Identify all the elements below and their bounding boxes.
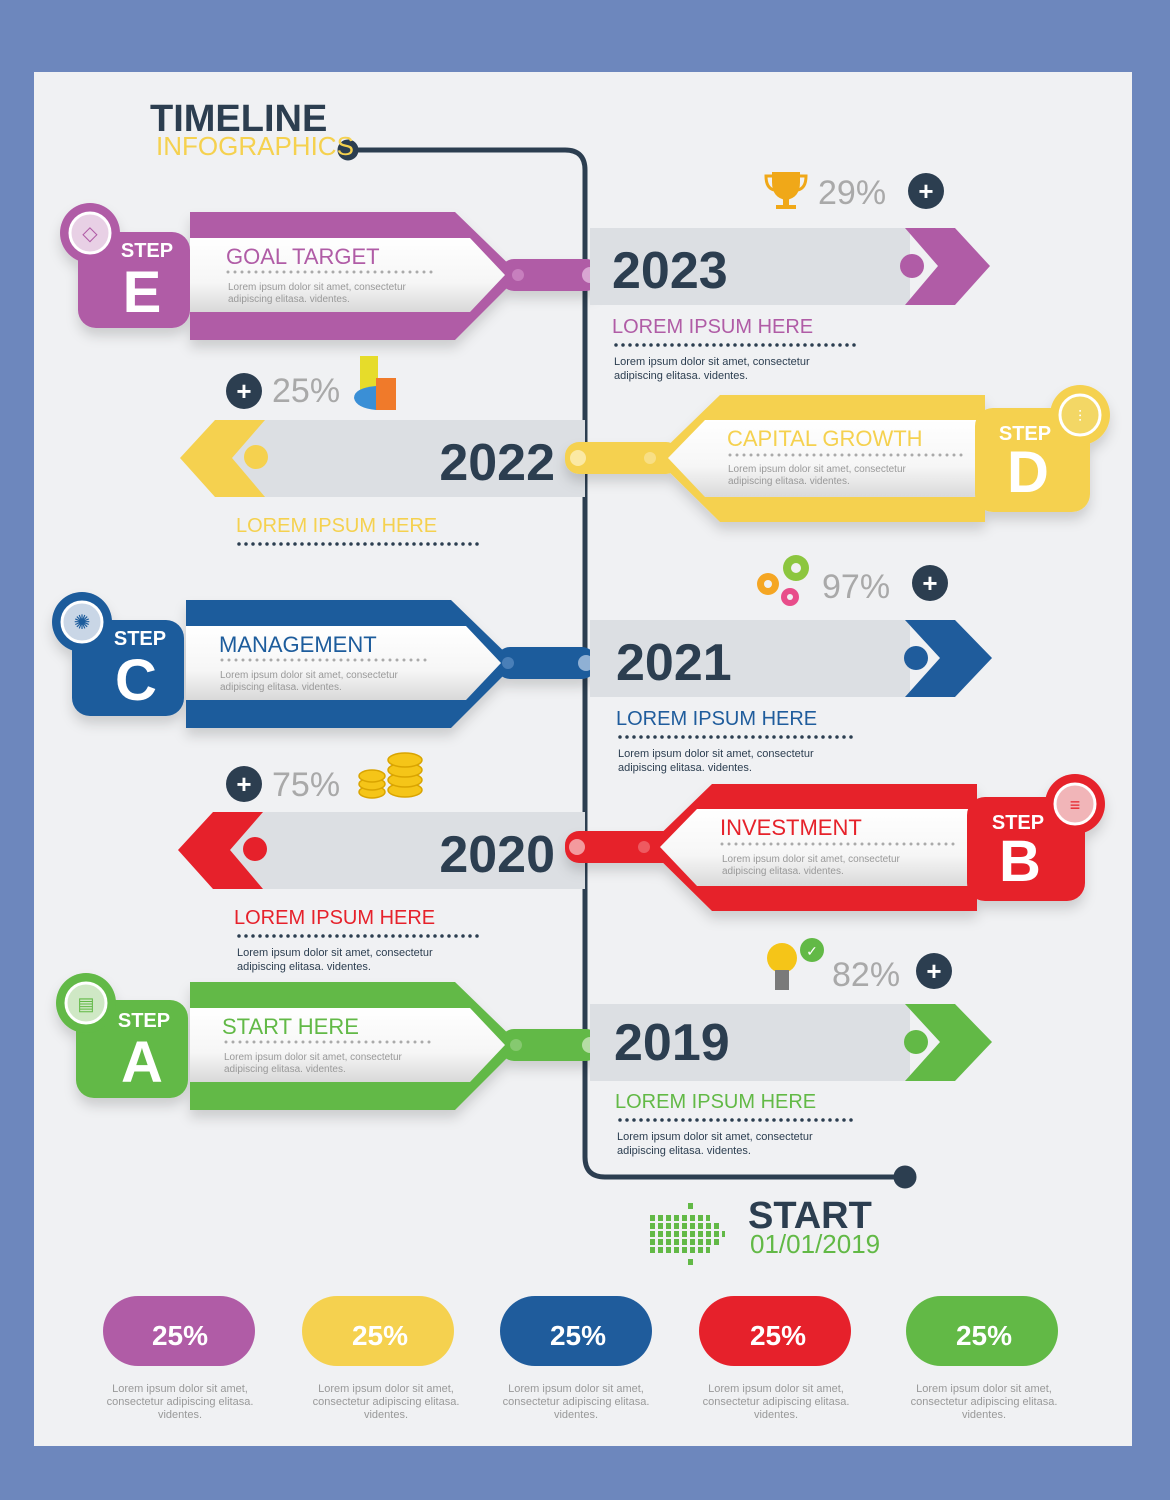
pill: green: Lorem ipsum dolor sit amet,: [916, 1383, 1052, 1395]
pill: yellow: [302, 1296, 459, 1421]
2023 year bar: LOREM IPSUM HERE: [612, 316, 813, 338]
2020 year bar: LOREM IPSUM HERE: [234, 907, 435, 929]
timeline line: [340, 142, 914, 1186]
2019 year bar: Lorem ipsum dolor sit amet, consectetur: [617, 1131, 813, 1143]
2021 year bar: Lorem ipsum dolor sit amet, consectetur: [618, 748, 814, 760]
stat 75%: [226, 753, 422, 804]
pill: purple: [103, 1296, 255, 1421]
step E banner: [60, 203, 600, 340]
step C banner: MANAGEMENT: [219, 632, 377, 657]
step B banner: INVESTMENT: [720, 815, 862, 840]
2019 year bar: [590, 1004, 992, 1157]
2021 year bar: 2021: [616, 634, 732, 692]
2021 year bar: adipiscing elitasa. videntes.: [618, 762, 752, 774]
stat 29%: [766, 172, 944, 212]
pill: purple: Lorem ipsum dolor sit amet,: [112, 1383, 248, 1395]
icon: light bulb: ✓: [806, 943, 818, 959]
stat 82%: 82%: [832, 956, 900, 994]
step A banner: STEP: [118, 1010, 170, 1032]
2020 year bar: 2020: [439, 826, 555, 884]
stat 25%: [226, 356, 396, 410]
step C banner: C: [115, 648, 157, 713]
pill: red: [699, 1296, 851, 1421]
step A banner: A: [121, 1030, 163, 1095]
2022 year bar: LOREM IPSUM HERE: [236, 515, 437, 537]
step D banner: [565, 385, 1110, 522]
step C banner: [52, 592, 596, 728]
2020 year bar: Lorem ipsum dolor sit amet, consectetur: [237, 947, 433, 959]
pill: yellow: Lorem ipsum dolor sit amet,: [318, 1383, 454, 1395]
icon: light bulb: [767, 938, 824, 990]
pill: blue: videntes.: [554, 1409, 598, 1421]
stat 97%: [757, 555, 948, 606]
step E banner: ◇: [82, 223, 98, 245]
pill: green: videntes.: [962, 1409, 1006, 1421]
2019 year bar: LOREM IPSUM HERE: [615, 1091, 816, 1113]
step A banner: adipiscing elitasa. videntes.: [224, 1064, 346, 1075]
2023 year bar: 2023: [612, 242, 728, 300]
step C banner: adipiscing elitasa. videntes.: [220, 682, 342, 693]
pill: purple: videntes.: [158, 1409, 202, 1421]
title: [150, 98, 354, 161]
step B banner: Lorem ipsum dolor sit amet, consectetur: [722, 854, 901, 865]
icon: dotted arrow: [650, 1206, 725, 1262]
stat 29%: +: [918, 176, 934, 206]
stat 75%: 75%: [272, 766, 340, 804]
pill: blue: Lorem ipsum dolor sit amet,: [508, 1383, 644, 1395]
step D banner: adipiscing elitasa. videntes.: [728, 476, 850, 487]
step D banner: D: [1007, 440, 1049, 505]
pill: green: consectetur adipiscing elitasa.: [911, 1396, 1057, 1408]
pill: blue: [500, 1296, 652, 1421]
2021 year bar: [590, 620, 992, 774]
icon: pie chart: [354, 356, 396, 410]
step B banner: adipiscing elitasa. videntes.: [722, 866, 844, 877]
2023 year bar: adipiscing elitasa. videntes.: [614, 370, 748, 382]
step B banner: B: [999, 829, 1041, 894]
step D banner: STEP: [999, 423, 1051, 445]
pill: yellow: consectetur adipiscing elitasa.: [313, 1396, 459, 1408]
icon: gears: [757, 555, 809, 606]
2022 year bar: 2022: [439, 434, 555, 492]
step E banner: E: [123, 260, 161, 325]
2019 year bar: adipiscing elitasa. videntes.: [617, 1145, 751, 1157]
2020 year bar: [178, 812, 585, 973]
pill: purple: consectetur adipiscing elitasa.: [107, 1396, 253, 1408]
2021 year bar: LOREM IPSUM HERE: [616, 708, 817, 730]
pill: purple: 25%: [152, 1320, 208, 1351]
step D banner: Lorem ipsum dolor sit amet, consectetur: [728, 464, 907, 475]
pill: yellow: videntes.: [364, 1409, 408, 1421]
pill: red: 25%: [750, 1320, 806, 1351]
stat 97%: +: [922, 568, 938, 598]
step E banner: Lorem ipsum dolor sit amet, consectetur: [228, 282, 407, 293]
step D banner: CAPITAL GROWTH: [727, 426, 923, 451]
step C banner: Lorem ipsum dolor sit amet, consectetur: [220, 670, 399, 681]
2019 year bar: 2019: [614, 1014, 730, 1072]
2022 year bar: [180, 420, 585, 544]
pill: red: consectetur adipiscing elitasa.: [703, 1396, 849, 1408]
2023 year bar: [590, 228, 990, 382]
step E banner: adipiscing elitasa. videntes.: [228, 294, 350, 305]
step A banner: ▤: [77, 994, 95, 1014]
icon: coins: [359, 753, 422, 798]
stat 97%: 97%: [822, 568, 890, 606]
stat 25%: +: [236, 376, 252, 406]
title: TIMELINE: [150, 98, 327, 140]
step B banner: ≡: [1070, 795, 1080, 815]
step B banner: STEP: [992, 812, 1044, 834]
stat 25%: 25%: [272, 372, 340, 410]
title: INFOGRAPHICS: [156, 131, 354, 161]
2023 year bar: Lorem ipsum dolor sit amet, consectetur: [614, 356, 810, 368]
step A banner: START HERE: [222, 1014, 359, 1039]
icon: trophy: [766, 172, 806, 209]
start label: 01/01/2019: [750, 1229, 880, 1259]
pill: yellow: 25%: [352, 1320, 408, 1351]
stat 82%: +: [926, 956, 942, 986]
step A banner: [56, 973, 600, 1110]
step C banner: STEP: [114, 628, 166, 650]
pill: green: [906, 1296, 1058, 1421]
step E banner: GOAL TARGET: [226, 244, 380, 269]
2020 year bar: adipiscing elitasa. videntes.: [237, 961, 371, 973]
pill: red: Lorem ipsum dolor sit amet,: [708, 1383, 844, 1395]
pill: blue: consectetur adipiscing elitasa.: [503, 1396, 649, 1408]
start label: [748, 1195, 880, 1259]
step A banner: Lorem ipsum dolor sit amet, consectetur: [224, 1052, 403, 1063]
step E banner: STEP: [121, 240, 173, 262]
pill: red: videntes.: [754, 1409, 798, 1421]
pill: blue: 25%: [550, 1320, 606, 1351]
step D banner: ⫶: [1078, 409, 1082, 426]
pill: green: 25%: [956, 1320, 1012, 1351]
step C banner: ✺: [74, 612, 90, 634]
step B banner: [565, 774, 1105, 911]
stat 29%: 29%: [818, 174, 886, 212]
stat 82%: [767, 938, 952, 994]
stat 75%: +: [236, 769, 252, 799]
start label: START: [748, 1195, 872, 1237]
